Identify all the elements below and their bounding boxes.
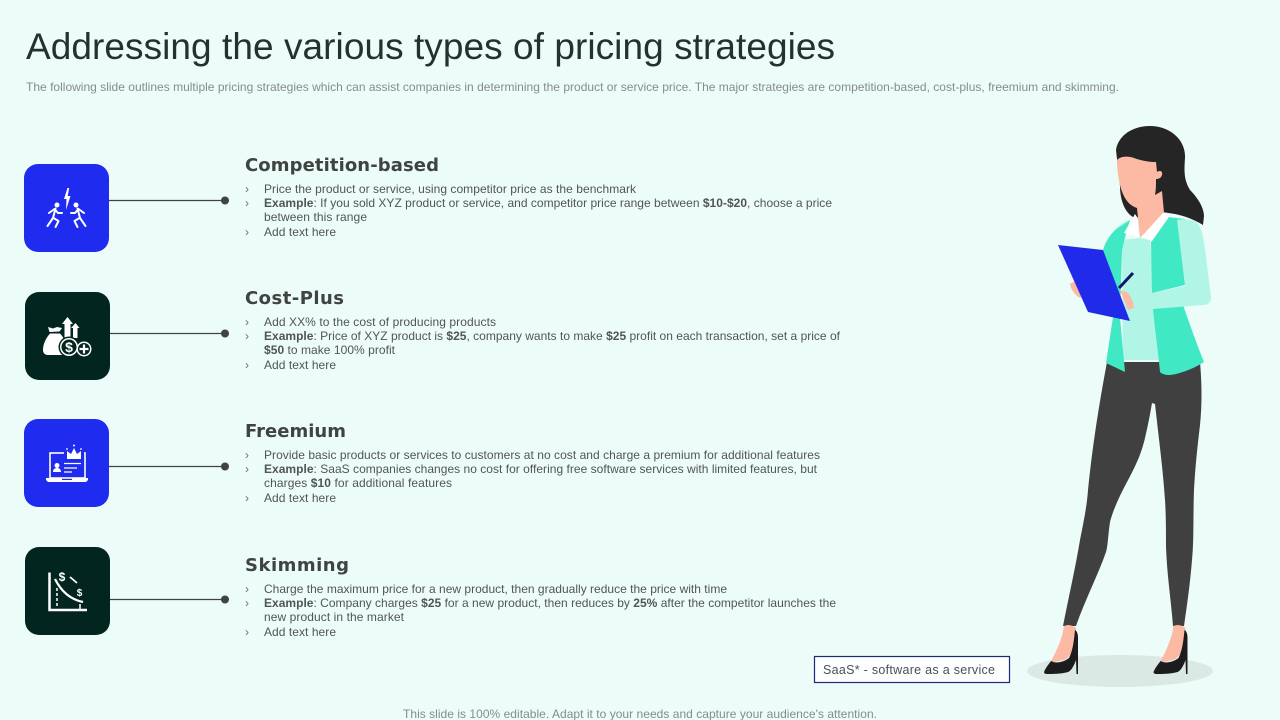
heading: Skimming [245, 555, 349, 576]
floor shadow [1027, 655, 1213, 687]
clipboard [1058, 245, 1130, 321]
pants [1063, 362, 1202, 626]
bullet list: new product in the market [264, 610, 405, 624]
bullet list: Price the product or service, using competitor price as the benchmark [264, 182, 637, 196]
bullet list: Example: SaaS companies changes no cost for offering free software services with limited features, but [264, 462, 818, 476]
bullet list: $50 to make 100% profit [264, 343, 396, 357]
bullet list: between this range [264, 210, 367, 224]
panel: competition-based [24, 155, 832, 252]
bullet list: › [245, 196, 249, 210]
illustration: woman holding clipboard [1027, 126, 1213, 687]
bullet list: Example: Price of XYZ product is $25, company wants to make $25 profit on each transaction, set a price of [264, 329, 841, 343]
bullet list: charges $10 for additional features [264, 476, 452, 490]
hair [1116, 126, 1204, 225]
left foot and shoe [1044, 625, 1078, 674]
bullet list: Example: Company charges $25 for a new product, then reduces by 25% after the competitor launches the [264, 596, 836, 610]
icon: money bag with arrows: $ [65, 339, 73, 355]
collar [1124, 213, 1169, 241]
bullet list [245, 582, 836, 639]
bullet list: Add text here [264, 225, 336, 239]
bullet list: › [245, 329, 249, 343]
face and neck [1117, 157, 1164, 238]
panel: skimming [25, 547, 836, 639]
shirt torso [1122, 238, 1160, 360]
shoulder left [1105, 220, 1130, 250]
bullet list: Add XX% to the cost of producing products [264, 315, 496, 329]
bullet list [245, 448, 820, 505]
bullet list: Example: If you sold XYZ product or service, and competitor price range between $10-$20, choose a price [264, 196, 832, 210]
bullet list: Add text here [264, 625, 336, 639]
connector line [109, 196, 229, 204]
panel: freemium [24, 419, 820, 507]
pen [1119, 273, 1133, 288]
right hand [1120, 290, 1134, 310]
sleeve right [1152, 219, 1211, 309]
bullet list [245, 315, 841, 372]
connector line [110, 596, 229, 604]
bullet list [245, 182, 832, 239]
bullet list: Charge the maximum price for a new product, then gradually reduce the price with time [264, 582, 727, 596]
connector line [110, 330, 229, 338]
vest left [1103, 220, 1130, 372]
bullet list: › [245, 315, 249, 329]
bullet list: › [245, 596, 249, 610]
heading: Freemium [245, 421, 346, 442]
bullet list: › [245, 225, 249, 239]
right foot and shoe [1154, 625, 1188, 674]
icon: money bag with arrows [25, 292, 110, 380]
icon: falling price chart [25, 547, 110, 635]
bullet list: Add text here [264, 491, 336, 505]
heading: Cost-Plus [245, 288, 344, 309]
heading: Competition-based [245, 155, 439, 176]
callout: SaaS note [814, 656, 1010, 682]
bullet list: Provide basic products or services to customers at no cost and charge a premium for additional features [264, 448, 820, 462]
bullet list: › [245, 491, 249, 505]
bullet list: › [245, 448, 249, 462]
panel: cost-plus [25, 288, 841, 380]
vest right [1151, 217, 1204, 375]
bullet list: › [245, 182, 249, 196]
bullet list: Add text here [264, 358, 336, 372]
connector line [109, 462, 229, 470]
bullet list: › [245, 582, 249, 596]
title: Addressing the various types of pricing strategies [26, 26, 835, 67]
subtitle text: The following slide outlines multiple pricing strategies which can assist companies in determining the product or service price. The major strategies are competition-based, cost-plus, freemium and skimming. [26, 80, 1119, 94]
callout: SaaS note: SaaS* - software as a service [823, 663, 995, 677]
bullet list: › [245, 625, 249, 639]
icon: competing people [24, 164, 109, 252]
icon: falling price chart: $ [59, 570, 66, 584]
icon: falling price chart: $ [77, 588, 83, 599]
left hand [1070, 280, 1087, 298]
bullet list: › [245, 462, 249, 476]
bullet list: › [245, 358, 249, 372]
icon: laptop with crown [24, 419, 109, 507]
